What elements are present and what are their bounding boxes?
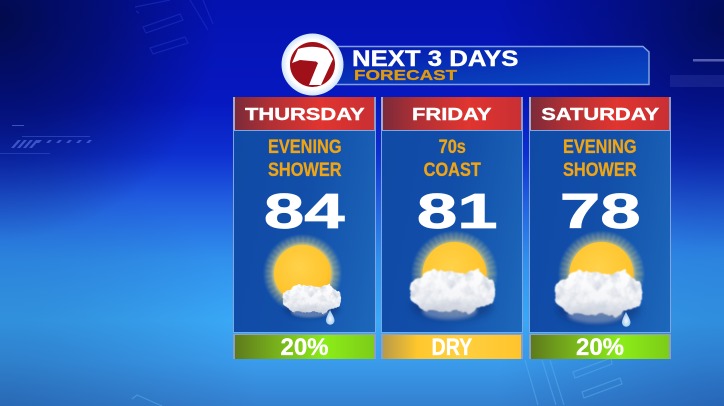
saturday body (529, 130, 671, 333)
saturday high temperature: 78 (560, 185, 640, 239)
friday header (381, 97, 523, 130)
saturday header: SATURDAY (541, 104, 659, 124)
saturday condition (563, 137, 637, 181)
thursday body (233, 130, 376, 333)
saturday precipitation bar: 20% (576, 334, 624, 361)
saturday condition: SHOWER (563, 160, 637, 181)
thursday condition: EVENING (268, 137, 341, 158)
friday header: FRIDAY (412, 104, 492, 124)
friday dry bar: DRY (432, 334, 472, 361)
subheading: forecast: FORECAST (354, 67, 457, 84)
friday high temperature: 81 (417, 185, 497, 239)
friday condition: 70s (438, 137, 466, 158)
icon: friday sun and cloud (409, 230, 498, 321)
thursday header (233, 97, 376, 130)
icon: saturday sun and cloud (554, 230, 646, 327)
thursday condition: SHOWER (268, 160, 341, 181)
heading: next 3 days: NEXT 3 DAYS (352, 46, 518, 71)
friday condition: COAST (423, 160, 481, 181)
panel: thursday (233, 97, 376, 361)
icon: channel 7 logo (282, 34, 344, 96)
friday body (381, 130, 523, 333)
saturday header (529, 97, 671, 130)
saturday condition: EVENING (563, 137, 637, 158)
title banner (335, 46, 650, 86)
thursday precipitation bar: 20% (280, 334, 329, 361)
icon: thursday sun and cloud (262, 234, 342, 325)
friday dry bar (381, 334, 523, 359)
panel: saturday (529, 97, 671, 361)
panel: friday (381, 97, 523, 361)
thursday high temperature: 84 (264, 185, 345, 239)
thursday header: THURSDAY (245, 104, 364, 124)
thursday precipitation bar (233, 334, 376, 359)
saturday precipitation bar (529, 334, 671, 359)
friday condition (423, 137, 481, 181)
thursday condition (268, 137, 342, 181)
